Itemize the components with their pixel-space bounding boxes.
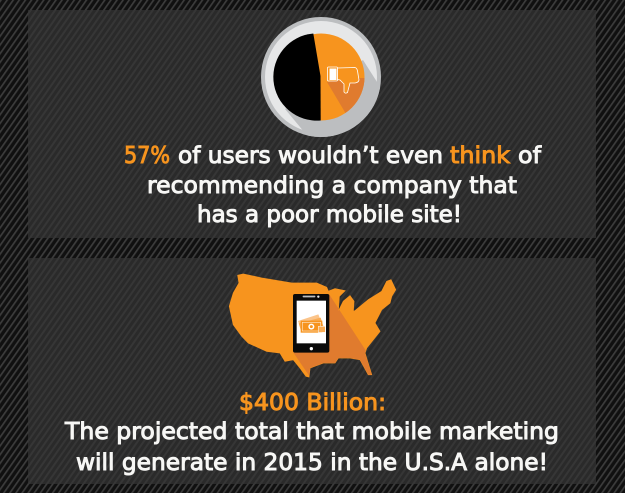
wallet tab	[318, 326, 325, 332]
thumb cuff fill	[330, 68, 336, 80]
panel background	[28, 258, 596, 484]
outer gray ring	[261, 17, 381, 137]
inner light ring	[265, 21, 377, 133]
line three: has a poor mobile site!	[197, 200, 462, 228]
middle banknote	[299, 318, 323, 332]
phone camera	[317, 295, 319, 298]
front banknote	[301, 321, 322, 333]
projected total text	[64, 388, 559, 476]
thumb long shadow	[327, 78, 364, 113]
line one	[124, 141, 542, 169]
statistic text	[124, 141, 542, 228]
panel: poor mobile site statistic	[28, 10, 596, 238]
line two: recommending a company that	[147, 171, 517, 199]
line one: of	[518, 141, 542, 169]
map of the USA	[229, 274, 396, 377]
phone body	[293, 294, 329, 353]
phone long shadow	[293, 294, 372, 376]
heading: $400 Billion: $400 Billion:	[239, 388, 386, 416]
icon: smartphone	[293, 294, 329, 353]
line one: The projected total that mobile marketing	[64, 417, 559, 445]
line one: of users wouldn’t even	[178, 141, 443, 169]
panel: projected mobile marketing total	[28, 258, 596, 484]
back banknote	[298, 314, 321, 328]
line two: will generate in 2015 in the U.S.A alone!	[76, 448, 548, 476]
thumb hand outline	[338, 68, 359, 93]
thumb cuff outline	[328, 67, 338, 81]
phone screen	[297, 301, 326, 343]
panel background	[28, 10, 596, 238]
icon: pie chart with thumbs down	[261, 17, 381, 137]
banknote coin	[308, 324, 314, 330]
banknote coin centre	[310, 325, 313, 328]
line one: 57%	[124, 141, 170, 169]
banknote border	[302, 322, 321, 331]
orange pie slice	[278, 34, 364, 120]
icon: USA map with phone	[229, 274, 396, 380]
ring long shadow	[285, 60, 380, 137]
black pie slice	[273, 34, 321, 121]
phone home button	[310, 347, 313, 350]
icon: banknotes	[298, 314, 325, 333]
phone speaker	[303, 296, 315, 297]
line one: think	[450, 141, 510, 169]
icon: thumbs down	[328, 67, 359, 93]
